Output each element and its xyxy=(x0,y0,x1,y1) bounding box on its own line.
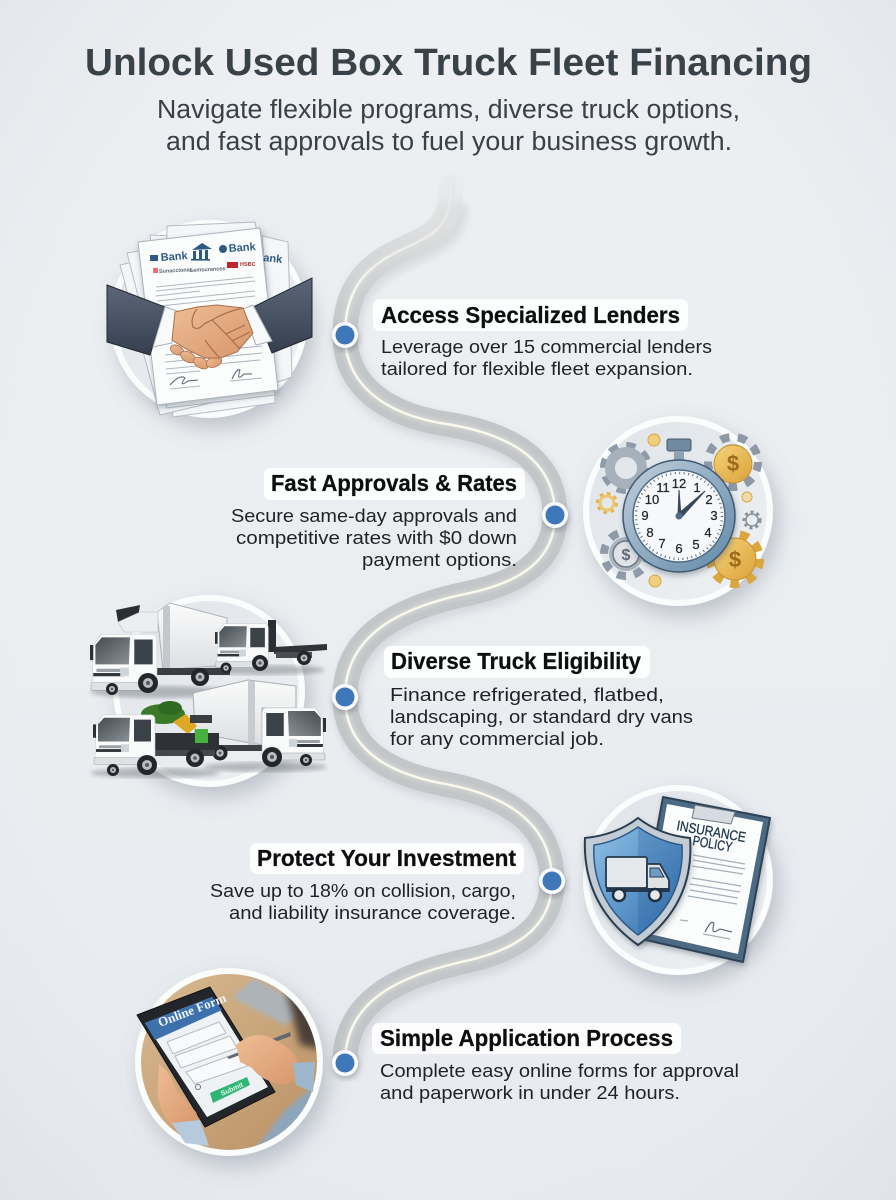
icon: stopwatch with gears: $ xyxy=(727,451,739,476)
clock numerals: 10 xyxy=(645,492,659,507)
signatures xyxy=(170,377,198,385)
text card: diverse truck eligibility: for any commercial job. xyxy=(390,728,604,749)
icon: lender documents and handshake: Sunaccionas xyxy=(159,267,193,275)
subtitle xyxy=(157,96,740,156)
step 1: access specialized lenders xyxy=(107,222,712,417)
icon: lender documents and handshake: Lemsurances xyxy=(190,266,226,274)
icon: shield and insurance policy xyxy=(585,788,770,972)
node marker 1 xyxy=(332,322,358,348)
clock numerals: 9 xyxy=(641,508,649,523)
text card: simple application process xyxy=(372,1023,739,1103)
title: Unlock Used Box Truck Fleet Financing xyxy=(85,42,812,84)
icon: stopwatch with gears xyxy=(586,419,770,603)
text card: fast approvals and rates: Fast Approvals & Rates xyxy=(271,470,517,496)
dry van truck xyxy=(193,680,326,767)
node marker 4 xyxy=(539,868,565,894)
clock numerals: 6 xyxy=(675,541,683,556)
stopwatch case xyxy=(623,460,735,572)
clock numerals: 8 xyxy=(646,525,654,540)
flatbed truck xyxy=(215,620,327,674)
text card: diverse truck eligibility: Diverse Truck Eligibility xyxy=(391,648,641,674)
step 4: protect your investment xyxy=(210,788,770,972)
handshake xyxy=(107,278,312,371)
node marker 3 xyxy=(332,684,358,710)
icon: delivery truck xyxy=(606,857,669,901)
icon: four box trucks xyxy=(90,598,327,784)
step 3: diverse truck eligibility xyxy=(90,598,693,784)
text card: diverse truck eligibility xyxy=(384,646,693,749)
step 2: fast approvals and rates xyxy=(231,419,770,603)
text card: simple application process: and paperwork in under 24 hours. xyxy=(380,1082,680,1103)
text card: diverse truck eligibility: Finance refrigerated, flatbed, xyxy=(390,684,664,705)
text card: protect your investment: Protect Your Investment xyxy=(257,845,516,871)
text card: fast approvals and rates: Secure same-day approvals and xyxy=(231,505,517,526)
shield xyxy=(585,818,690,945)
subtitle: and fast approvals to fuel your business growth. xyxy=(166,128,732,156)
text card: fast approvals and rates xyxy=(231,468,525,570)
icon: lender documents and handshake: HSBC xyxy=(240,262,256,268)
clock numerals: 3 xyxy=(710,508,718,523)
icon: tablet online form photo: Submit xyxy=(220,1082,245,1098)
text card: simple application process: Simple Application Process xyxy=(380,1025,673,1051)
text card: access specialized lenders: Access Specialized Lenders xyxy=(381,302,680,328)
icon: lender documents and handshake: ank xyxy=(263,252,284,266)
icon: tablet online form photo: Online Form xyxy=(156,990,228,1030)
stopwatch crown xyxy=(667,439,691,451)
icon: tablet online form photo xyxy=(135,970,325,1160)
clock numerals: 5 xyxy=(692,537,700,552)
tablet xyxy=(137,987,275,1127)
icon: lender documents and handshake: Bank xyxy=(160,250,189,264)
text card: protect your investment xyxy=(210,843,524,923)
text card: protect your investment: Save up to 18% on collision, cargo, xyxy=(210,880,516,901)
icon: lender documents and handshake: Bank xyxy=(228,241,257,255)
refrigerated truck xyxy=(90,603,230,695)
clock numerals xyxy=(641,476,718,556)
clock numerals: 4 xyxy=(704,525,712,540)
subtitle: Navigate flexible programs, diverse truck options, xyxy=(157,96,740,124)
text card: protect your investment: and liability insurance coverage. xyxy=(229,902,516,923)
clock numerals: 11 xyxy=(656,480,670,495)
text card: fast approvals and rates: competitive rates with $0 down xyxy=(236,527,517,548)
clipboard xyxy=(637,797,770,962)
node marker 5 xyxy=(332,1050,358,1076)
landscaping truck xyxy=(93,701,219,776)
icon: bank building xyxy=(150,243,227,261)
winding road connector xyxy=(345,175,557,1068)
clock numerals: 1 xyxy=(693,480,701,495)
clock numerals: 2 xyxy=(705,492,713,507)
text card: access specialized lenders xyxy=(373,299,712,379)
text card: access specialized lenders: tailored for flexible fleet expansion. xyxy=(381,358,693,379)
text card: diverse truck eligibility: landscaping, or standard dry vans xyxy=(390,706,693,727)
icon: stopwatch with gears: $ xyxy=(729,547,741,572)
gears xyxy=(598,437,760,584)
hand holding tablet xyxy=(158,1064,200,1126)
icon: stopwatch with gears: $ xyxy=(622,547,631,564)
icon: lender documents and handshake xyxy=(107,222,312,417)
icon: shield and insurance policy: INSURANCE xyxy=(675,817,747,845)
clock hands xyxy=(678,490,681,516)
step 5: simple application process xyxy=(135,970,739,1160)
hand with pen xyxy=(227,1032,315,1092)
text card: access specialized lenders: Leverage over 15 commercial lenders xyxy=(381,336,712,357)
node marker 2 xyxy=(542,502,568,528)
icon: shield and insurance policy: POLICY xyxy=(691,832,734,855)
clock numerals: 12 xyxy=(672,476,686,491)
text card: fast approvals and rates: payment options. xyxy=(362,549,517,570)
text card: simple application process: Complete easy online forms for approval xyxy=(380,1060,739,1081)
clock numerals: 7 xyxy=(658,536,666,551)
